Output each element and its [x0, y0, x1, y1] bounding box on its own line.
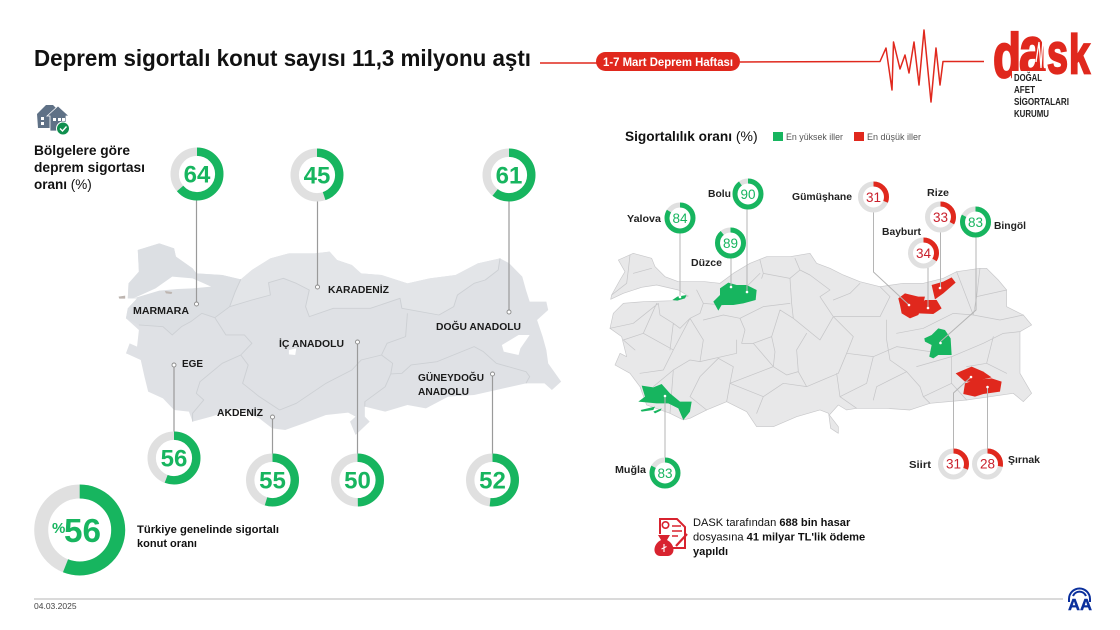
text: Türkiye ratio: Türkiye genelinde sigortalı — [137, 524, 279, 536]
region labels: DOĞU ANADOLU — [436, 320, 521, 333]
heading: insurance rate: Sigortalılık oranı (%) — [625, 128, 758, 144]
donut: Türkiye 56: % — [52, 520, 65, 537]
donut: Akdeniz 55 — [250, 415, 295, 502]
province: Şırnak — [963, 378, 1002, 397]
donut: Yalova 84: Yalova — [627, 213, 661, 225]
donut: Siirt 31 — [909, 376, 972, 477]
donut: Bolu 90: 90 — [740, 187, 756, 202]
donut: Bayburt 34 — [882, 226, 936, 309]
logo: DASK: AFET — [1014, 84, 1035, 96]
province: Bingöl — [924, 328, 952, 358]
donut: Rize 33 — [927, 187, 954, 289]
donut: Muğla 83: Muğla — [615, 464, 646, 476]
region labels: ANADOLU — [418, 386, 469, 398]
province: Muğla — [638, 384, 692, 420]
province: Bayburt — [918, 300, 942, 314]
logo: DASK: KURUMU — [1014, 108, 1049, 120]
footer rule — [34, 598, 1063, 600]
heading: regions: Bölgelere göre — [34, 143, 130, 158]
region labels: EGE — [182, 358, 203, 370]
donut: Akdeniz 55: 55 — [259, 468, 286, 494]
donut: Bolu 90: Bolu — [708, 188, 731, 200]
donut: Düzce 89: Düzce — [691, 257, 722, 269]
donut: Bingöl 83: 83 — [968, 215, 983, 230]
donut: Rize 33: 33 — [933, 210, 948, 225]
donut: Bingöl 83: Bingöl — [994, 220, 1026, 232]
text: DASK payment note: DASK tarafından 688 bin hasar — [693, 517, 850, 529]
donut: Siirt 31: Siirt — [909, 459, 932, 471]
donut: Güneydoğu Anadolu 52: 52 — [479, 468, 506, 494]
donut: Gümüşhane 31: Gümüşhane — [792, 191, 852, 203]
legend: En düşük iller — [867, 132, 921, 142]
donut: Gümüşhane 31 — [792, 184, 910, 306]
map: regions of Turkey — [119, 243, 561, 435]
heading: regions: oranı (%) — [34, 177, 92, 192]
logo: DASK: SİGORTALARI — [1014, 95, 1069, 108]
donut: Doğu Anadolu 61 — [487, 153, 531, 314]
badge: Deprem Haftası — [596, 52, 740, 71]
donut: Şırnak 28 — [974, 386, 1040, 477]
region labels: KARADENİZ — [328, 283, 390, 296]
donut: Karadeniz 45 — [295, 153, 339, 289]
province: Yalova — [672, 295, 687, 301]
region labels: İÇ ANADOLU — [279, 337, 344, 350]
logo: AA — [1068, 588, 1092, 614]
text: DASK payment note: yapıldı — [693, 546, 728, 558]
donut: Bayburt 34: 34 — [916, 246, 931, 261]
text: Türkiye ratio: konut oranı — [137, 538, 197, 550]
province: Gümüşhane — [898, 293, 925, 318]
legend: En yüksek iller — [786, 132, 843, 142]
donut: Muğla 83 — [615, 395, 678, 486]
icon: insurance document and money bag — [654, 519, 687, 556]
donut: Türkiye 56 — [41, 492, 118, 568]
text: DASK payment note: dosyasına 41 milyar TL'lik ödeme — [693, 532, 865, 544]
region labels: MARMARA — [133, 305, 189, 317]
donut: Şırnak 28: Şırnak — [1008, 454, 1040, 466]
donut: Güneydoğu Anadolu 52 — [470, 372, 515, 502]
donut: Bayburt 34: Bayburt — [882, 226, 921, 238]
title: Deprem sigortalı konut sayısı 11,3 milyonu aştı — [34, 45, 531, 71]
donut: Doğu Anadolu 61: 61 — [496, 162, 522, 190]
donut: Bolu 90 — [708, 181, 761, 293]
logo: DASK: k — [1069, 23, 1090, 85]
donut: Türkiye 56: 56 — [64, 512, 101, 549]
donut: Düzce 89 — [691, 230, 744, 288]
donut: İç Anadolu 50 — [335, 340, 380, 502]
donut: Rize 33: Rize — [927, 187, 949, 199]
map: provinces of Turkey — [610, 253, 1032, 433]
region labels: GÜNEYDOĞU — [418, 371, 484, 384]
logo: DASK — [993, 12, 1090, 120]
icon: insured houses — [37, 105, 70, 135]
donut: Şırnak 28: 28 — [980, 456, 995, 472]
province: Düzce and Bolu — [713, 283, 757, 311]
donut: İç Anadolu 50: 50 — [344, 468, 371, 494]
logo: DASK: s — [1047, 22, 1068, 86]
heading: regions: deprem sigortası — [34, 160, 145, 175]
region labels — [133, 283, 521, 419]
province: Rize — [932, 277, 956, 299]
donut: Marmara 64: 64 — [184, 162, 211, 188]
logo: DASK: d — [993, 22, 1021, 91]
donut: Yalova 84 — [627, 205, 693, 298]
donut: Siirt 31: 31 — [946, 456, 961, 472]
date: 04.03.2025 — [34, 601, 77, 611]
logo: DASK: a — [1019, 12, 1047, 90]
badge: Deprem Haftası: 1-7 Mart Deprem Haftası — [603, 55, 733, 69]
donut: Marmara 64 — [175, 152, 219, 306]
logo: DASK: DOĞAL — [1014, 71, 1042, 84]
donut: Karadeniz 45: 45 — [304, 162, 330, 190]
legend — [773, 132, 921, 142]
donut: Gümüşhane 31: 31 — [866, 190, 881, 205]
donut: Ege 56 — [152, 363, 196, 480]
donut: Ege 56: 56 — [161, 446, 187, 472]
logo: AA: AA — [1068, 597, 1092, 614]
donut: Düzce 89: 89 — [723, 236, 738, 251]
donut: Bingöl 83 — [939, 209, 1026, 344]
donut: Yalova 84: 84 — [672, 211, 688, 226]
province: Siirt — [956, 367, 992, 382]
donut: Muğla 83: 83 — [657, 466, 673, 481]
region labels: AKDENİZ — [217, 406, 264, 419]
header red line with seismograph — [540, 30, 984, 102]
